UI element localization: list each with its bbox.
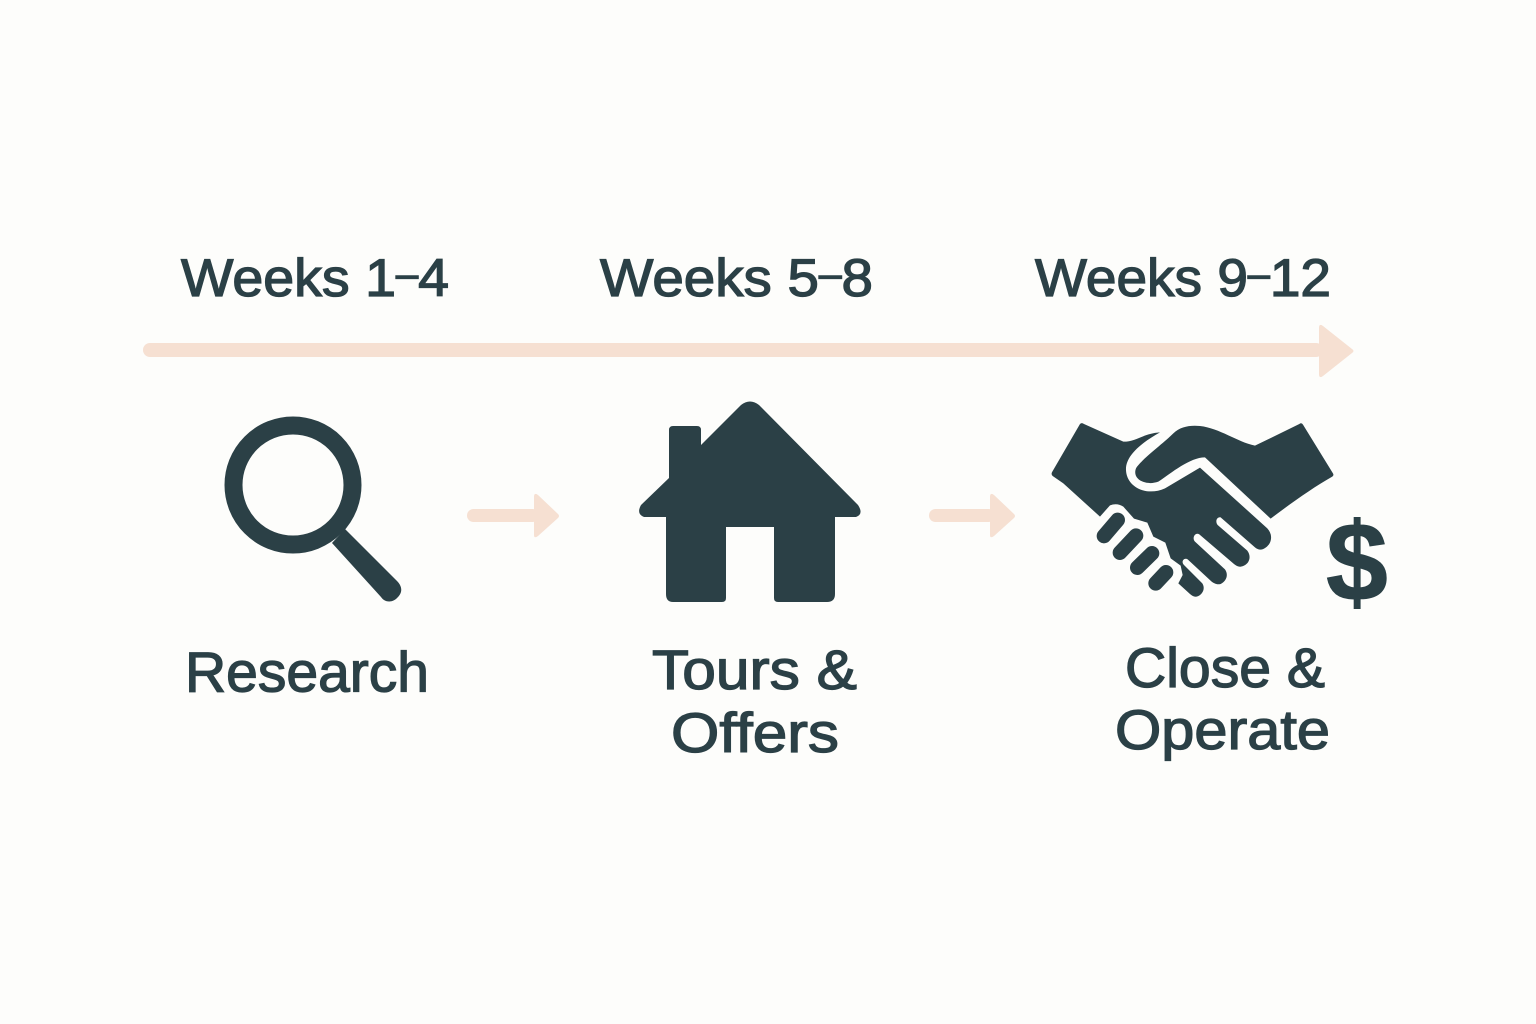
left hand xyxy=(1052,423,1271,597)
heading: Weeks 1-4: 4 xyxy=(418,249,449,308)
arrow: research to tours xyxy=(467,494,559,537)
label: Close & Operate: Close & xyxy=(1125,636,1325,699)
right hand xyxy=(1135,423,1333,519)
heading: Weeks 9-12: Weeks 9 xyxy=(1035,249,1240,308)
label: Tours & Offers: Tours & xyxy=(652,638,857,701)
icon: magnifying glass xyxy=(234,426,401,602)
icon: handshake xyxy=(1052,423,1333,597)
heading: Weeks 9-12: – xyxy=(1248,254,1271,296)
fingers of left hand xyxy=(1104,520,1166,583)
label: Research: Research xyxy=(185,640,429,704)
arrow: tours to close xyxy=(929,494,1015,537)
heading: Weeks 5-8: 8 xyxy=(842,249,873,308)
heading: Weeks 5-8: – xyxy=(819,254,842,296)
label: Close & Operate xyxy=(1115,636,1330,761)
label: Tours & Offers: Offers xyxy=(671,701,839,764)
icon: house xyxy=(639,402,861,602)
heading: Weeks 1-4: – xyxy=(396,254,419,296)
heading: Weeks 1-4: Weeks 1 xyxy=(181,249,386,308)
heading: Weeks 9-12: 12 xyxy=(1270,249,1331,308)
arrow: main timeline xyxy=(143,325,1354,377)
label: Close & Operate: Operate xyxy=(1115,698,1330,761)
label: Tours & Offers xyxy=(652,638,857,764)
heading: Weeks 5-8: Weeks 5 xyxy=(600,249,805,308)
icon: dollar sign: $ xyxy=(1326,500,1388,624)
